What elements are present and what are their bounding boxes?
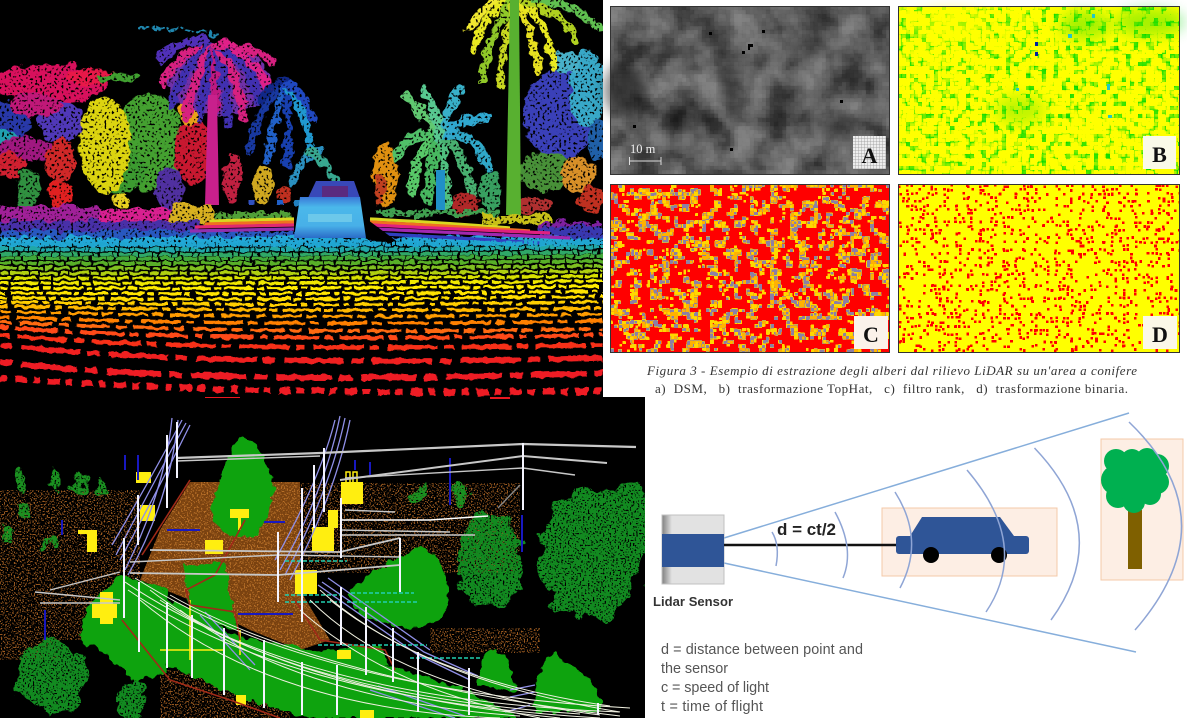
overhead gray wires bbox=[35, 444, 636, 603]
legend text: c = speed of light bbox=[661, 680, 769, 696]
white conductor bundle along corridor bbox=[125, 578, 630, 718]
panel: airborne lidar figure with four rasters bbox=[605, 6, 1185, 396]
roadside vegetation, left side bbox=[0, 45, 293, 214]
legend text bbox=[661, 642, 863, 715]
tall palm trunk bbox=[506, 0, 521, 215]
yellow sign clusters bbox=[78, 472, 374, 718]
legend text: the sensor bbox=[661, 661, 728, 677]
tall palm fronds bbox=[470, 0, 598, 85]
background trunks bbox=[248, 200, 300, 206]
panel: lidar principle diagram bbox=[653, 413, 1183, 715]
label D bbox=[1143, 316, 1177, 349]
cyan dashed lines bbox=[285, 561, 481, 658]
central road bbox=[140, 482, 330, 650]
figure caption bbox=[646, 363, 1137, 396]
dark red road outlines bbox=[122, 480, 395, 718]
purple palm tree bbox=[140, 28, 272, 125]
wave arcs bbox=[772, 422, 1182, 630]
trees bbox=[0, 468, 652, 718]
panel: power line corridor point cloud bbox=[0, 397, 652, 718]
right palm trunk bbox=[436, 170, 445, 210]
icon: tree bbox=[1101, 448, 1169, 569]
label D: D bbox=[1152, 322, 1168, 347]
raster B: TopHat bbox=[898, 6, 1185, 174]
road reflections bbox=[190, 219, 570, 243]
ground far field bbox=[0, 221, 603, 246]
distance line bbox=[724, 544, 897, 546]
lilac wire fans bbox=[112, 416, 535, 718]
tree target box bbox=[1101, 439, 1183, 580]
figure caption: a) DSM, b) trasformazione TopHat, c) filtro rank, d) trasformazione binaria. bbox=[655, 381, 1128, 396]
label C bbox=[854, 316, 888, 349]
sensor bbox=[662, 515, 724, 584]
panel: street lidar point cloud bbox=[0, 0, 608, 398]
legend text: t = time of flight bbox=[661, 699, 763, 715]
label A bbox=[853, 136, 886, 169]
palm trunk bbox=[205, 95, 219, 205]
car shadow bbox=[370, 222, 397, 246]
brown ground points bbox=[0, 483, 540, 718]
label C: C bbox=[863, 322, 879, 347]
figure caption: Figura 3 - Esempio di estrazione degli alberi dal rilievo LiDAR su un'area a conifere bbox=[646, 363, 1137, 378]
formula: d = ct/2 bbox=[777, 520, 836, 539]
raster A: DSM bbox=[605, 6, 890, 174]
low shrubs band bbox=[0, 205, 603, 234]
label B: B bbox=[1152, 142, 1167, 167]
scale bar: 10 m: 10 m bbox=[630, 142, 656, 156]
blue palm tree bbox=[250, 80, 335, 184]
icon: car bbox=[896, 517, 1029, 563]
car target box bbox=[882, 508, 1057, 576]
raster D: binary transform bbox=[898, 184, 1180, 352]
white poles bbox=[124, 422, 598, 715]
ground scan rows bbox=[0, 242, 603, 392]
label A: A bbox=[862, 143, 878, 168]
right palm tree bbox=[398, 88, 488, 205]
dark blue markers bbox=[45, 455, 522, 640]
label B bbox=[1143, 136, 1176, 169]
beam cone bbox=[724, 413, 1136, 652]
car bbox=[294, 181, 366, 238]
scale bar: 10 m bbox=[630, 142, 661, 165]
sensor label: Lidar Sensor bbox=[653, 594, 733, 609]
solid green trees and terrain bbox=[80, 437, 602, 718]
legend text: d = distance between point and bbox=[661, 642, 863, 658]
orange cypress and right undergrowth bbox=[373, 50, 608, 217]
raster C: rank filter bbox=[610, 184, 890, 352]
strip of red from upper panel bbox=[205, 397, 510, 398]
